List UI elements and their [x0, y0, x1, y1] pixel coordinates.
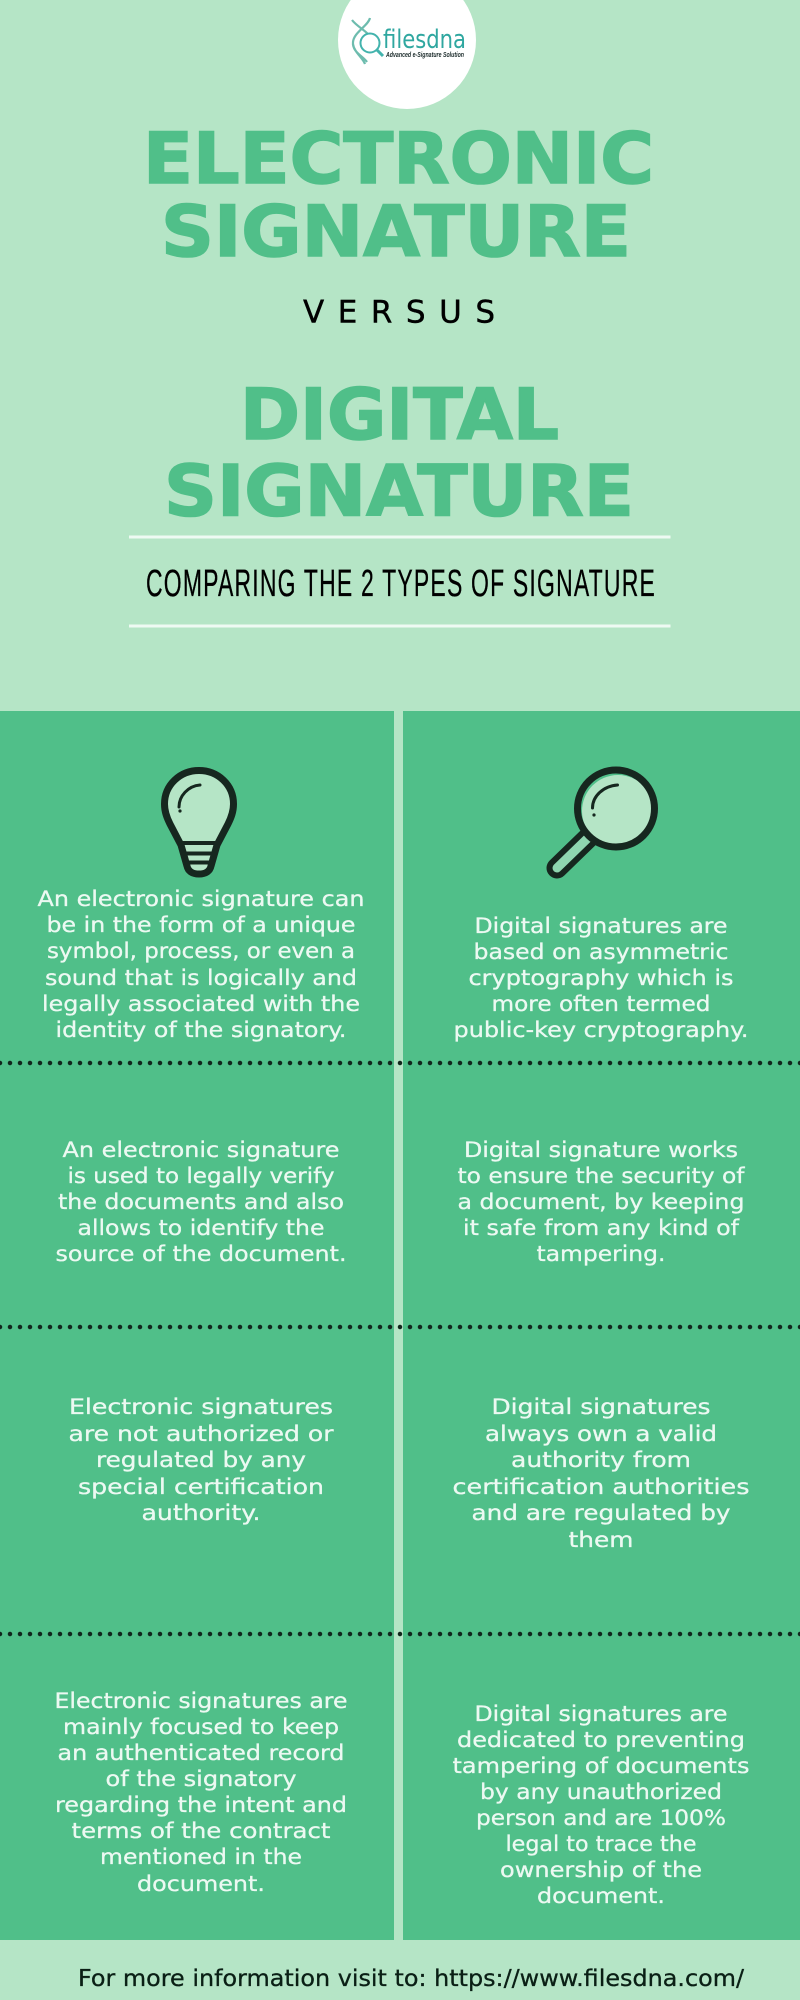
title: electronic signature: SIGNATURE [161, 191, 631, 273]
text: digital row 4: tampering of documents [452, 1754, 750, 1779]
text: digital row 1: Digital signatures are [474, 914, 728, 939]
text: digital row 2: Digital signature works [464, 1138, 738, 1163]
text: digital row 4: dedicated to preventing [457, 1728, 745, 1753]
text: electronic row 2: An electronic signature [62, 1138, 340, 1163]
logo badge: Advanced e-Signature Solution [385, 52, 464, 59]
text: electronic row 4: regarding the intent and [55, 1793, 347, 1818]
text: digital row 3: always own a valid [485, 1422, 717, 1447]
text: digital row 4: Digital signatures are [474, 1702, 728, 1727]
text: digital row 4: by any unauthorized [480, 1780, 722, 1805]
text: digital row 4: ownership of the [500, 1858, 702, 1883]
text: digital row 3: Digital signatures [492, 1395, 710, 1420]
text: digital row 1: based on asymmetric [474, 940, 728, 965]
title: digital signature: SIGNATURE [164, 450, 634, 532]
text: electronic row 4 [54, 1689, 348, 1897]
text: electronic row 3: special certification [78, 1475, 324, 1500]
text: digital row 3: authority from [511, 1448, 691, 1473]
text: electronic row 1: sound that is logically and [45, 966, 357, 991]
text: electronic row 1: legally associated with the [42, 992, 360, 1017]
text: electronic row 1: An electronic signature can [38, 887, 364, 912]
logo badge: filesdna [383, 25, 466, 55]
text: digital row 3: certification authorities [452, 1475, 750, 1500]
text: electronic row 1: symbol, process, or even a [47, 939, 355, 964]
text: digital row 4: legal to trace the [506, 1832, 696, 1857]
footer text: For more information visit to: https://www.filesdna.com/ [78, 1966, 744, 1992]
icon: magnifying glass [557, 770, 654, 868]
text: digital row 2: it safe from any kind of [463, 1216, 739, 1241]
text: digital row 3 [452, 1395, 750, 1553]
versus: VERSUS [303, 294, 495, 330]
text: digital row 1: public-key cryptography. [454, 1018, 748, 1043]
text: electronic row 4: document. [137, 1872, 265, 1897]
title: electronic signature [143, 118, 654, 273]
text: electronic row 4: Electronic signatures are [54, 1689, 348, 1714]
text: electronic row 4: of the signatory [106, 1767, 297, 1792]
text: electronic row 4: terms of the contract [72, 1819, 330, 1844]
text: digital row 1: more often termed [492, 992, 710, 1017]
text: digital row 3: them [568, 1528, 634, 1553]
text: digital row 4: document. [537, 1884, 665, 1909]
text: electronic row 4: mainly focused to keep [63, 1715, 339, 1740]
title: digital signature [164, 374, 634, 532]
icon: light bulb [164, 770, 234, 874]
comparison panel: digital signature column [403, 711, 800, 1940]
text: electronic row 1: be in the form of a unique [46, 913, 356, 938]
text: electronic row 1: identity of the signatory. [56, 1018, 346, 1043]
text: electronic row 4: an authenticated record [58, 1741, 344, 1766]
text: electronic row 3: authority. [142, 1501, 260, 1526]
comparison panel: electronic signature column [0, 711, 394, 1940]
text: electronic row 3: are not authorized or [68, 1422, 334, 1447]
text: electronic row 4: mentioned in the [100, 1845, 302, 1870]
logo badge [338, 0, 476, 109]
text: digital row 1 [454, 914, 748, 1043]
text: electronic row 2: allows to identify the [78, 1216, 324, 1241]
text: digital row 4: person and are 100% [476, 1806, 726, 1831]
text: electronic row 2: the documents and also [58, 1190, 344, 1215]
text: digital row 2 [458, 1138, 745, 1267]
text: electronic row 3 [68, 1395, 334, 1526]
text: electronic row 2 [56, 1138, 346, 1267]
text: digital row 2: tampering. [536, 1242, 666, 1267]
text: digital row 2: to ensure the security of [458, 1164, 745, 1189]
text: digital row 3: and are regulated by [472, 1501, 731, 1526]
title: digital signature: DIGITAL [240, 374, 559, 456]
text: electronic row 3: Electronic signatures [69, 1395, 333, 1420]
text: electronic row 3: regulated by any [96, 1448, 306, 1473]
text: electronic row 2: source of the document. [56, 1242, 346, 1267]
text: electronic row 1 [38, 887, 364, 1043]
text: electronic row 2: is used to legally verify [68, 1164, 335, 1189]
title: electronic signature: ELECTRONIC [143, 118, 654, 200]
text: digital row 2: a document, by keeping [458, 1190, 744, 1215]
text: digital row 1: cryptography which is [468, 966, 734, 991]
text: digital row 4 [452, 1702, 750, 1909]
